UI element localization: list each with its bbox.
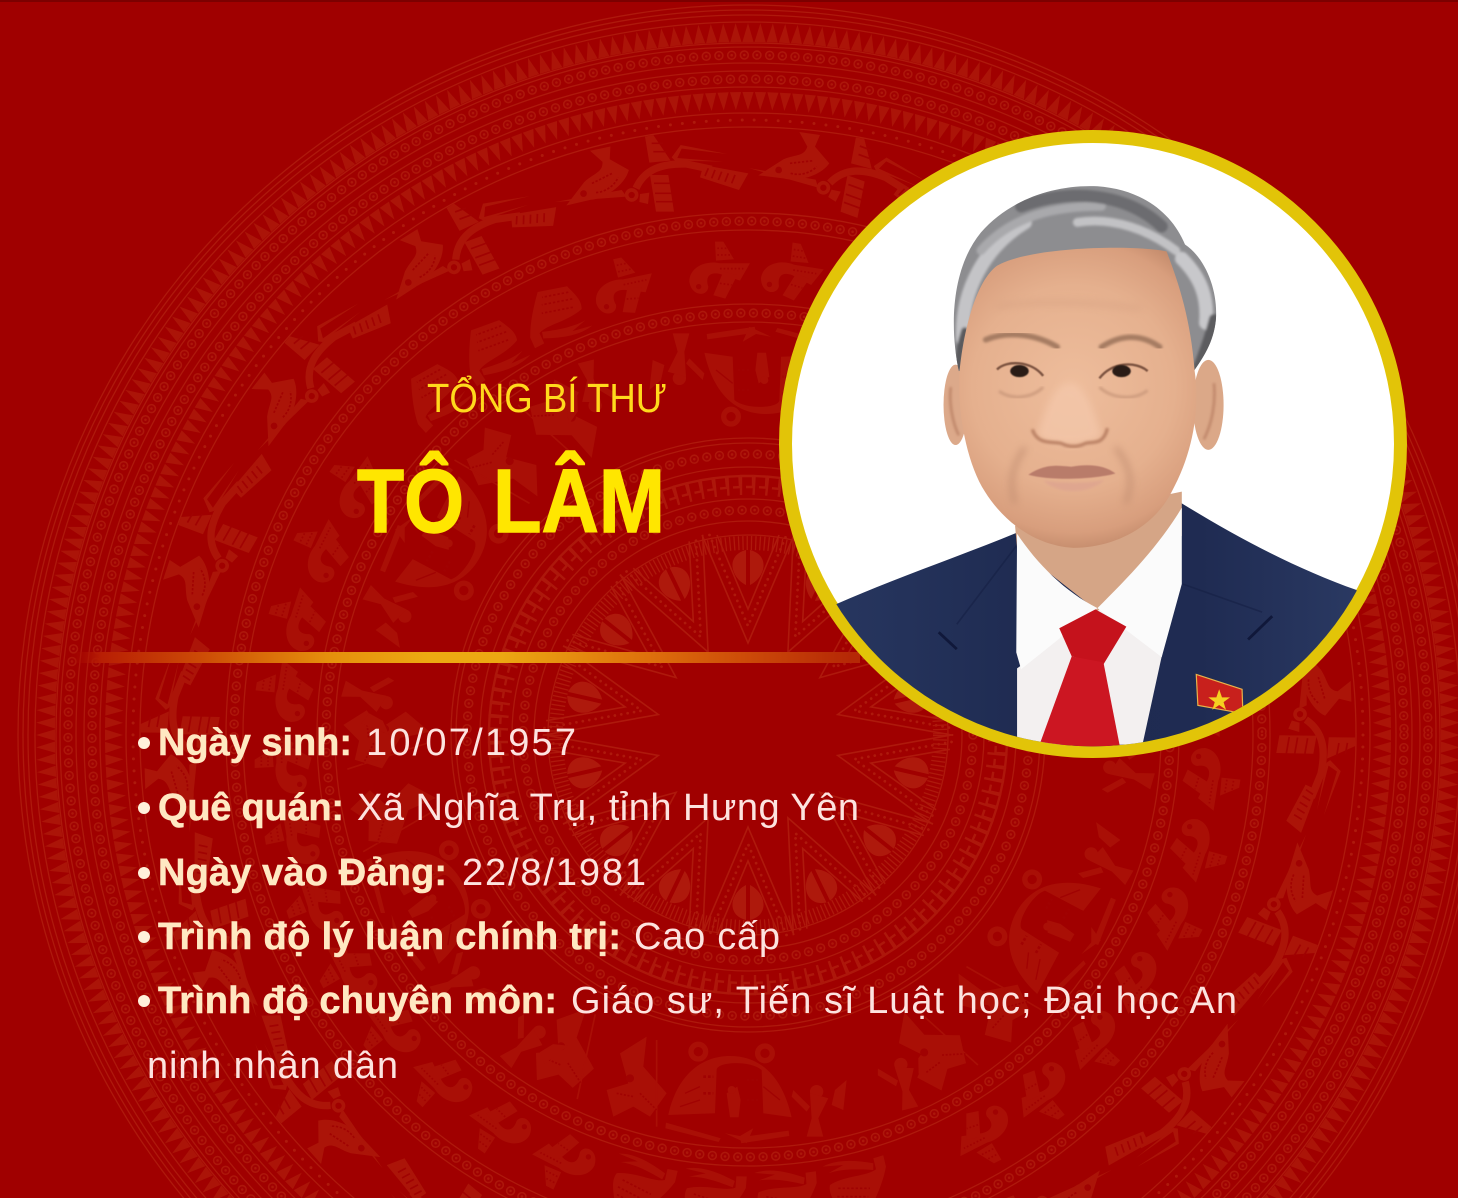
ears (944, 364, 964, 445)
subtitle: position: TỔNG BÍ THƯ (427, 374, 667, 421)
row: professional qualification: Giáo sư, Tiến sĩ Luật học; Đại học An (571, 980, 1237, 1022)
lapel pin (1196, 674, 1243, 713)
top edge shade (0, 0, 1458, 2)
hair (954, 186, 1216, 371)
facial features (986, 335, 1160, 491)
portrait photo illustration (836, 186, 1357, 746)
tie (1059, 609, 1126, 664)
divider line (70, 652, 860, 663)
row: hometown: Xã Nghĩa Trụ, tỉnh Hưng Yên (357, 787, 859, 829)
yellow ring (786, 136, 1400, 752)
row: professional qualification (138, 980, 1237, 1087)
row: hometown: Quê quán: (158, 787, 344, 829)
row: political theory level: Trình độ lý luận chính trị: (158, 916, 621, 958)
row: professional qualification: ninh nhân dân (147, 1045, 398, 1087)
lapel notches (939, 616, 1272, 649)
row: party admission date: 22/8/1981 (462, 852, 646, 894)
row: date of birth: Ngày sinh: (158, 722, 352, 764)
face (959, 248, 1196, 548)
facial shading (1008, 386, 1134, 502)
row: political theory level: Cao cấp (634, 916, 780, 958)
portrait medallion (786, 136, 1400, 773)
title: name (357, 450, 665, 552)
info list (138, 722, 1237, 1087)
title: name: LÂM (493, 450, 665, 552)
row: hometown (138, 787, 859, 829)
shirt (1017, 608, 1162, 745)
row: date of birth: 10/07/1957 (366, 722, 576, 764)
row: party admission date (138, 852, 646, 894)
neck (1015, 492, 1182, 614)
row: professional qualification: Trình độ chuyên môn: (158, 980, 557, 1022)
suit jacket (836, 503, 1357, 746)
title: name: TÔ (357, 450, 464, 552)
row: date of birth (138, 722, 576, 764)
row: party admission date: Ngày vào Đảng: (158, 852, 447, 894)
